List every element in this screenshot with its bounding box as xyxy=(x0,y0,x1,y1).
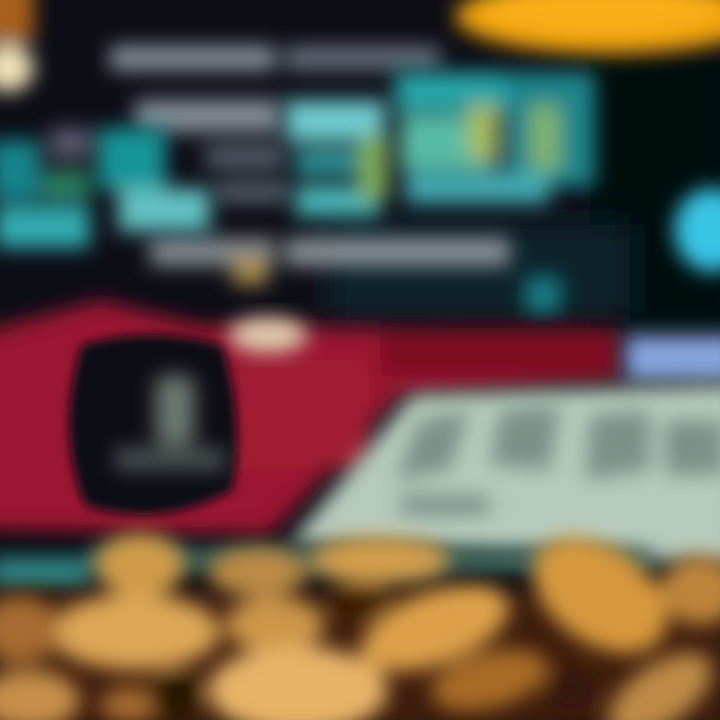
cream object xyxy=(228,317,308,353)
cyan blob xyxy=(674,188,720,272)
top-left lamp xyxy=(0,0,34,92)
golden chips xyxy=(0,513,720,720)
teal sign blocks xyxy=(0,72,595,314)
panel: dark upper wall xyxy=(0,0,720,330)
black shield xyxy=(69,335,237,515)
blue-ish card xyxy=(625,335,720,381)
yellow lamp xyxy=(455,0,720,54)
pale paper sheet xyxy=(288,384,720,565)
dark base under chips xyxy=(0,590,720,720)
blurred sign text lines xyxy=(110,46,510,285)
teal strip xyxy=(0,548,650,592)
shield emblem xyxy=(115,375,225,470)
panel: red band xyxy=(0,300,620,535)
